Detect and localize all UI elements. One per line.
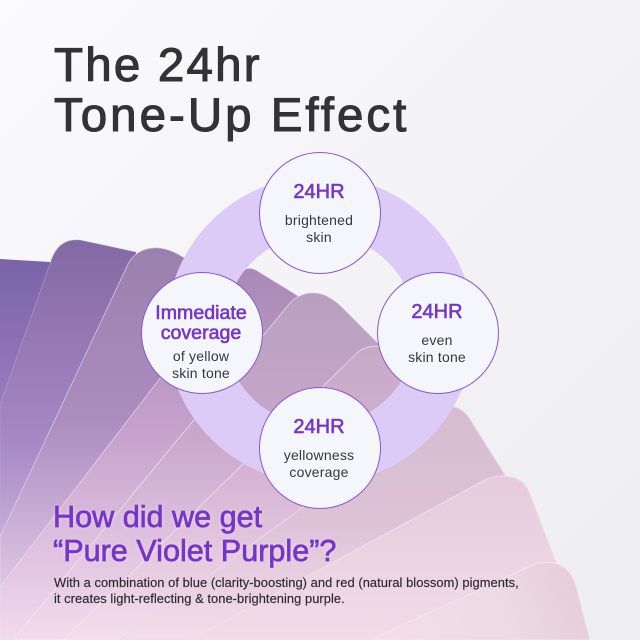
description: it creates light-reflecting & tone-brightening purple. [54,591,345,606]
subheading: How did we get [53,500,262,534]
label: 24HR yellowness coverage: yellowness [284,447,354,463]
blade 8 [190,476,575,640]
label: 24HR even skin tone: even [421,332,453,348]
blade 6 [63,346,480,640]
circle: yellowness coverage [259,387,381,509]
circle: immediate coverage [141,272,263,394]
label: 24HR brightened skin [285,181,353,245]
description: With a combination of blue (clarity-boosting) and red (natural blossom) pigments, [54,575,519,590]
circle: even skin tone [377,272,499,394]
label: 24HR brightened skin: 24HR [293,181,345,203]
label: 24HR brightened skin: brightened [285,212,353,228]
blade 1 [0,259,60,640]
description [54,575,519,606]
blade 2 [0,240,150,640]
title [54,39,409,142]
circle: brightened skin [259,152,381,274]
label: 24HR yellowness coverage: coverage [289,464,349,480]
blade 7 [120,406,540,640]
label: 24HR brightened skin: skin [306,229,332,245]
label: immediate coverage of yellow skin tone: coverage [161,322,241,344]
title: Tone-Up Effect [54,89,409,142]
title: The 24hr [54,39,262,92]
blade 4 [0,268,340,640]
label: immediate coverage of yellow skin tone [155,302,247,381]
blade 5 [13,293,420,640]
label: 24HR yellowness coverage [284,416,354,480]
label: 24HR even skin tone: 24HR [411,301,463,323]
blade 3 [0,248,260,640]
blade 9 [370,562,590,640]
label: 24HR even skin tone [408,301,466,365]
subheading: “Pure Violet Purple”? [53,534,336,568]
label: immediate coverage of yellow skin tone: skin tone [172,365,230,381]
subheading [53,500,336,568]
label: 24HR yellowness coverage: 24HR [293,416,345,438]
label: 24HR even skin tone: skin tone [408,349,466,365]
label: immediate coverage of yellow skin tone: of yellow [173,348,229,364]
label: immediate coverage of yellow skin tone: Immediate [155,302,247,324]
